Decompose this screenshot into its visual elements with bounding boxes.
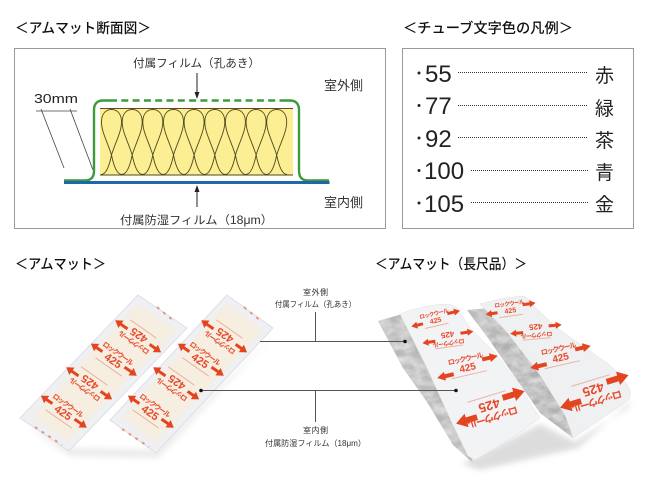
pack labels: 425 — [128, 325, 150, 345]
photo: AmMat packs: 425 — [79, 372, 101, 392]
legend row: 55 red: 55 — [425, 61, 452, 88]
legend row: 77 green: 緑 — [595, 98, 614, 120]
legend row: 105 gold: 金 — [595, 194, 614, 216]
roll labels: ロックウール — [418, 306, 450, 321]
pack labels — [108, 313, 166, 362]
photo: AmMat long packs: 425 — [504, 307, 517, 316]
callout: indoor film: 室内側 — [303, 425, 328, 435]
label: bottom film: 付属防湿フィルム（18μm） — [120, 213, 273, 227]
legend row: 100 blue: 青 — [595, 162, 614, 184]
roll 2 white top — [480, 296, 630, 438]
roll 1 white top — [400, 304, 540, 460]
photo: AmMat long packs: 425 — [440, 329, 455, 340]
roll 1 grey side — [378, 314, 473, 463]
heading: cross-section: ＜アムマット断面図＞ — [15, 20, 151, 36]
photo: AmMat packs: ロックウール — [51, 391, 85, 420]
photo: AmMat long packs: 425 — [551, 351, 571, 366]
photo: AmMat packs: 425 — [214, 325, 236, 345]
photo: AmMat packs — [20, 295, 274, 458]
label: indoor side: 室内側 — [324, 195, 363, 210]
arrow: top film — [194, 73, 200, 99]
photo: AmMat packs: 425 — [139, 403, 161, 423]
pack shadow — [462, 400, 632, 470]
pack 1 — [20, 295, 187, 451]
arrow: bottom film — [194, 185, 200, 207]
roll labels — [409, 304, 462, 331]
photo: AmMat packs: ロックウール — [203, 328, 237, 357]
roll labels: 425 — [429, 317, 442, 326]
photo: AmMat long packs: 425 — [581, 379, 606, 400]
photo: AmMat packs: 425 — [102, 351, 124, 371]
photo: AmMat long packs: ロックウール — [540, 340, 577, 357]
photo: AmMat long packs: 425 — [528, 321, 543, 332]
film: green envelope — [64, 100, 329, 180]
label: top film: 付属フィルム（孔あき） — [133, 57, 260, 70]
panel: cross-section diagram — [14, 48, 386, 228]
roll 2 grey side — [467, 308, 573, 438]
legend row: 77 green — [418, 93, 614, 120]
legend row: 55 red — [418, 61, 614, 88]
photo: AmMat packs: ロックウール — [138, 391, 172, 420]
photo: AmMat long packs: ロックウール — [432, 337, 465, 349]
callout: outdoor film — [260, 287, 407, 343]
photo: AmMat long packs: ロックウール — [520, 330, 553, 340]
insulation core — [100, 108, 293, 175]
legend row: 92 brown — [418, 126, 614, 153]
photo: AmMat long packs: ロックウール — [570, 387, 623, 414]
photo: AmMat long packs — [378, 296, 635, 470]
label: 30mm: 30mm — [34, 91, 78, 106]
legend row: 100 blue — [418, 158, 614, 185]
legend row: 105 gold — [418, 191, 614, 218]
label: outdoor side: 室外側 — [324, 78, 363, 93]
photo: AmMat packs: ロックウール — [188, 339, 222, 368]
callout: indoor film — [199, 389, 458, 448]
callout: outdoor film: 付属フィルム（孔あき） — [275, 299, 356, 309]
photo: AmMat long packs: 425 — [477, 395, 502, 416]
pack labels: ロックウール — [117, 328, 151, 357]
pack shadow — [24, 334, 274, 458]
photo: AmMat long packs: ロックウール — [494, 297, 525, 310]
callout: indoor film: 付属防湿フィルム（18μm） — [265, 438, 366, 448]
heading: AmMat long: ＜アムマット（長尺品）＞ — [375, 256, 527, 272]
heading: AmMat: ＜アムマット＞ — [15, 256, 106, 272]
pack 2 — [110, 295, 273, 453]
legend row: 100 blue: 100 — [424, 158, 464, 185]
legend row: 92 brown: 92 — [425, 126, 452, 153]
film: blue vapour barrier — [64, 181, 330, 184]
callout: outdoor film: 室外側 — [303, 287, 328, 297]
photo: AmMat packs: ロックウール — [155, 375, 189, 404]
legend row: 105 gold: 105 — [424, 191, 464, 218]
dimension lines: 30mm — [36, 109, 93, 170]
legend row: 55 red: 赤 — [595, 65, 614, 87]
photo: AmMat long packs: 425 — [458, 361, 478, 376]
photo: AmMat packs: ロックウール — [101, 339, 135, 368]
photo: AmMat packs: 425 — [166, 372, 188, 392]
photo: AmMat long packs: ロックウール — [447, 350, 484, 367]
legend row: 77 green: 77 — [425, 93, 452, 120]
heading: tube colour legend: ＜チューブ文字色の凡例＞ — [403, 20, 573, 36]
photo: AmMat packs: ロックウール — [68, 375, 102, 404]
photo: AmMat packs: 425 — [189, 351, 211, 371]
panel: colour legend — [402, 48, 634, 228]
fibre loops — [101, 110, 287, 174]
photo: AmMat packs: 425 — [52, 403, 74, 423]
legend row: 92 brown: 茶 — [595, 130, 614, 152]
photo: AmMat long packs: ロックウール — [466, 403, 519, 430]
